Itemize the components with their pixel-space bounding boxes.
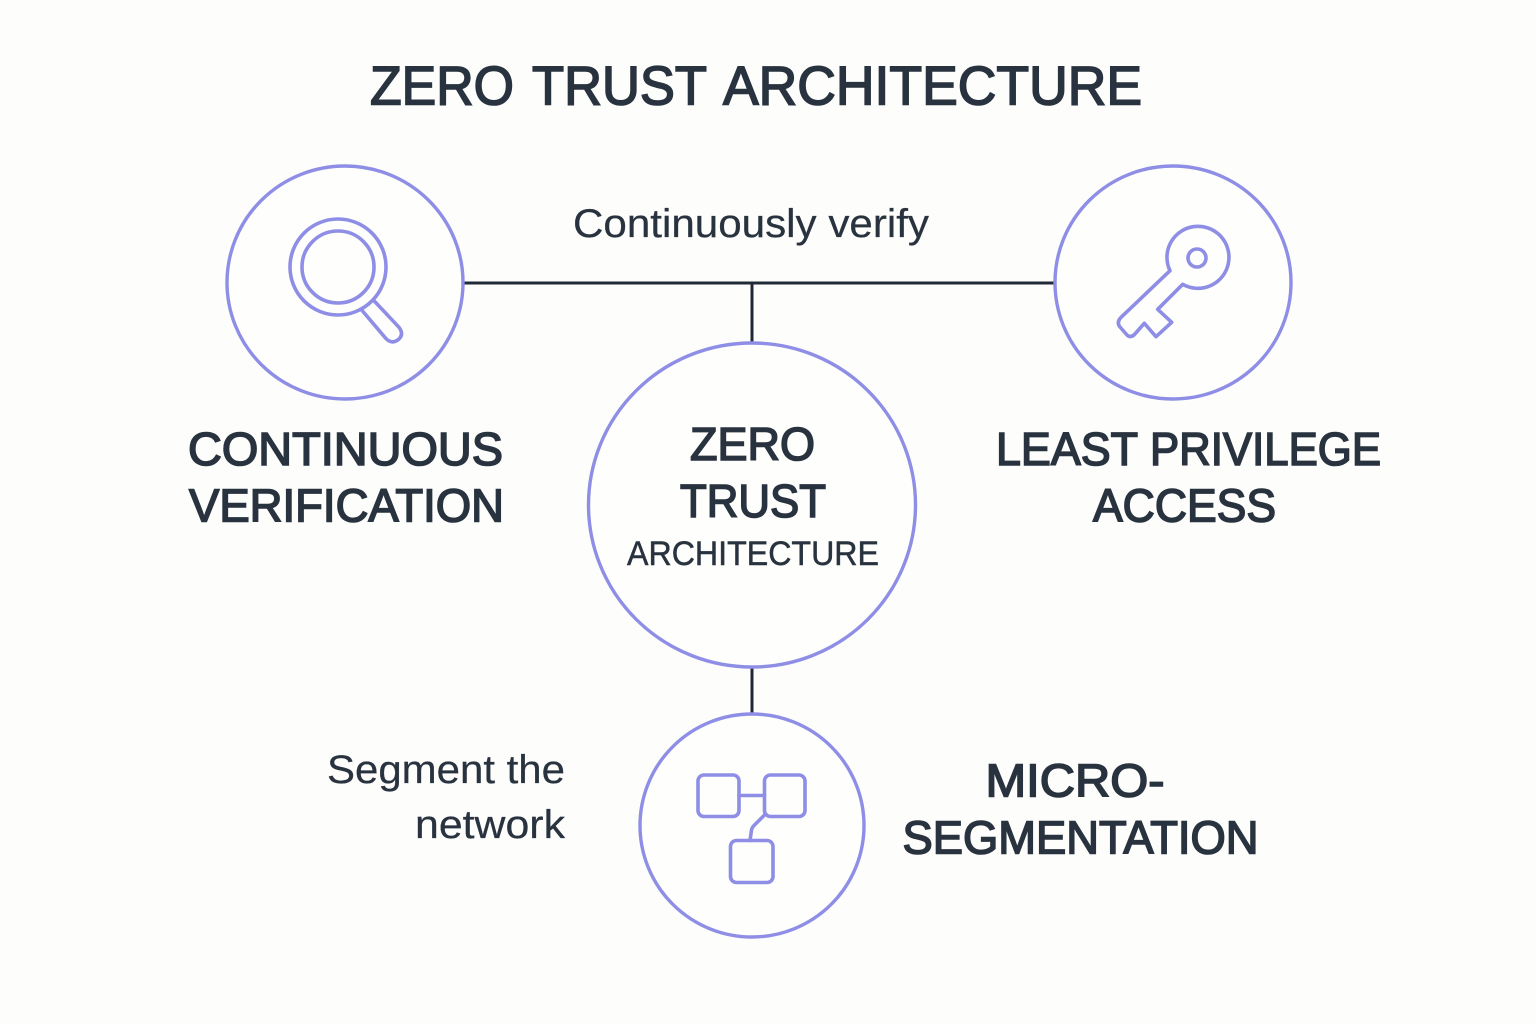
panel: central hub — [588, 343, 916, 667]
heading: micro-segmentation: MICRO- — [986, 754, 1164, 806]
heading: continuous verification: CONTINUOUS — [188, 423, 503, 475]
heading: least privilege access — [996, 423, 1381, 532]
heading: zero trust architecture hub: ARCHITECTURE — [627, 535, 879, 573]
label: segment the network: Segment the — [327, 748, 565, 792]
title: ARCHITECTURE — [723, 54, 1142, 116]
icon: magnifying glass — [290, 219, 402, 342]
heading: least privilege access: LEAST — [996, 423, 1138, 475]
label: segment the network — [327, 748, 566, 847]
icon: key — [1118, 226, 1229, 337]
heading: zero trust architecture hub: ZERO — [690, 418, 815, 470]
heading: zero trust architecture hub: TRUST — [680, 475, 826, 527]
heading: least privilege access: PRIVILEGE — [1150, 423, 1381, 475]
circle: micro-segmentation — [640, 714, 864, 937]
icon: connected segments — [698, 775, 805, 882]
heading: least privilege access: ACCESS — [1093, 480, 1276, 532]
circle: central hub — [588, 343, 916, 667]
circle: continuous verification — [227, 166, 463, 399]
panel: continuous verification — [188, 166, 504, 532]
heading: zero trust architecture hub — [627, 418, 879, 573]
label: continuously verify: Continuously verify — [573, 202, 929, 246]
circle: least privilege access — [1055, 166, 1291, 399]
heading: continuous verification: VERIFICATION — [189, 480, 504, 532]
heading: micro-segmentation — [902, 754, 1258, 864]
title: TRUST — [532, 54, 707, 116]
panel: micro-segmentation — [327, 714, 1258, 937]
connector lines — [464, 283, 1055, 715]
panel: least privilege access — [996, 166, 1381, 532]
title — [370, 54, 1142, 116]
heading: continuous verification — [188, 423, 504, 532]
label: segment the network: network — [415, 803, 566, 847]
title: ZERO — [370, 54, 514, 116]
heading: micro-segmentation: SEGMENTATION — [902, 812, 1258, 864]
